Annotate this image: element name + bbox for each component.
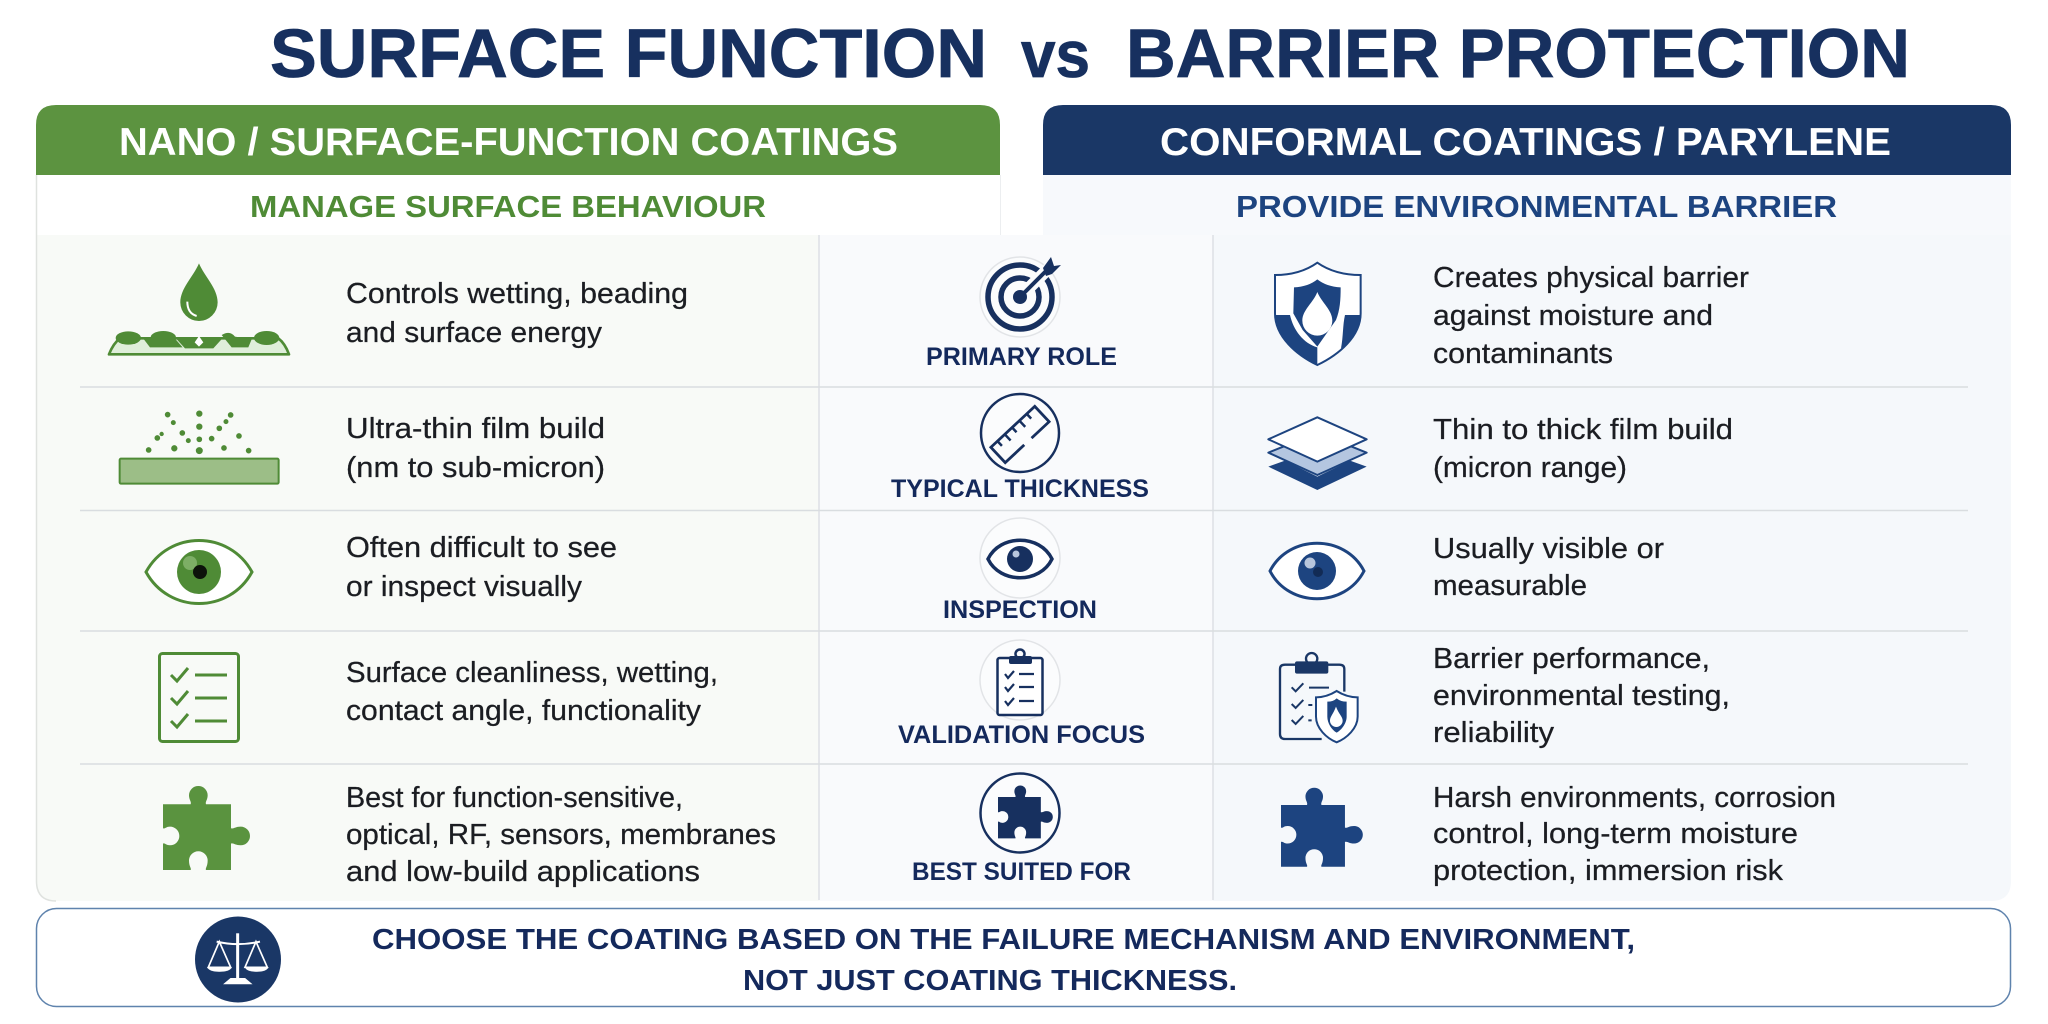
icon: primary role target: [980, 257, 1061, 337]
title: [270, 15, 1910, 92]
text: ultra-thin film build: (nm to sub-micron): [346, 452, 605, 484]
icon: green checklist: [160, 654, 238, 742]
text: thin to thick film: Thin to thick film build: [1433, 414, 1733, 446]
label: typical thickness: TYPICAL THICKNESS: [891, 475, 1149, 503]
text: barrier performance: [1433, 643, 1730, 749]
panel header: conformal coatings: [1043, 105, 2011, 175]
subheading: provide environmental barrier: PROVIDE ENVIRONMENTAL BARRIER: [1236, 189, 1837, 224]
text: often difficult to see: [346, 532, 617, 603]
text: surface cleanliness: Surface cleanliness, wetting,: [346, 657, 718, 689]
text: barrier performance: environmental testing,: [1433, 680, 1730, 712]
text: harsh environments: protection, immersion risk: [1433, 855, 1784, 887]
label: validation focus: VALIDATION FOCUS: [898, 721, 1145, 749]
text: thin to thick film: [1433, 414, 1733, 484]
text: controls wetting: [346, 278, 688, 349]
icon: shield with drop: [1275, 263, 1361, 365]
panel header: conformal coatings: CONFORMAL COATINGS / PARYLENE: [1160, 121, 1891, 164]
title: SURFACE FUNCTION: [270, 15, 987, 92]
text: best for function-sensitive: [346, 782, 776, 888]
text: thin to thick film: (micron range): [1433, 452, 1627, 484]
icon: inspection eye: [980, 518, 1060, 598]
text: often difficult to see: Often difficult to see: [346, 532, 617, 564]
icon: water drop on surface: [109, 263, 289, 354]
text: creates physical barrier: against moisture and: [1433, 300, 1713, 332]
icon: green puzzle piece: [163, 786, 250, 870]
callout text: [372, 924, 1635, 997]
text: often difficult to see: or inspect visually: [346, 571, 583, 603]
text: usually visible: measurable: [1433, 570, 1587, 602]
icon: balance scales: [195, 916, 281, 1002]
text: best for function-sensitive: optical, RF, sensors, membranes: [346, 819, 776, 851]
icon: ultra-thin film spray: [120, 411, 279, 484]
panel header: nano coatings: [36, 105, 1000, 175]
text: barrier performance: Barrier performance,: [1433, 643, 1710, 675]
callout text: CHOOSE THE COATING BASED ON THE FAILURE MECHANISM AND ENVIRONMENT,: [372, 924, 1635, 956]
text: surface cleanliness: [346, 657, 718, 727]
text: controls wetting: Controls wetting, beading: [346, 278, 688, 310]
text: harsh environments: control, long-term moisture: [1433, 818, 1798, 850]
label: inspection: INSPECTION: [943, 596, 1097, 624]
text: creates physical barrier: [1433, 262, 1750, 370]
text: usually visible: [1433, 533, 1665, 602]
text: harsh environments: [1433, 782, 1836, 887]
text: barrier performance: reliability: [1433, 717, 1555, 749]
icon: validation clipboard: [980, 640, 1060, 720]
title: BARRIER PROTECTION: [1126, 15, 1910, 92]
subheading: manage surface behaviour: MANAGE SURFACE BEHAVIOUR: [250, 189, 766, 224]
callout: footer: [36, 908, 2010, 1006]
text: usually visible: Usually visible or: [1433, 533, 1665, 565]
text: ultra-thin film build: Ultra-thin film build: [346, 413, 605, 445]
text: ultra-thin film build: [346, 413, 605, 484]
text: best for function-sensitive: Best for function-sensitive,: [346, 782, 683, 814]
text: harsh environments: Harsh environments, corrosion: [1433, 782, 1836, 814]
panel: comparison table background: [36, 175, 2011, 901]
label: primary role: PRIMARY ROLE: [926, 343, 1117, 371]
icon: film layers: [1268, 417, 1367, 490]
text: controls wetting: and surface energy: [346, 317, 603, 349]
icon: blue puzzle piece: [1281, 788, 1363, 867]
text: creates physical barrier: contaminants: [1433, 338, 1613, 370]
icon: best suited puzzle: [980, 774, 1060, 852]
title: vs: [1021, 17, 1090, 91]
icon: green eye: [146, 540, 252, 604]
panel header: nano coatings: NANO / SURFACE-FUNCTION COATINGS: [119, 121, 898, 164]
callout text: NOT JUST COATING THICKNESS.: [743, 965, 1237, 997]
text: surface cleanliness: contact angle, functionality: [346, 695, 702, 727]
label: best suited for: BEST SUITED FOR: [912, 858, 1131, 886]
text: creates physical barrier: Creates physical barrier: [1433, 262, 1750, 294]
icon: typical thickness ruler: [981, 394, 1059, 472]
text: best for function-sensitive: and low-build applications: [346, 856, 700, 888]
icon: clipboard with shield: [1280, 653, 1358, 742]
icon: blue eye: [1270, 543, 1364, 599]
